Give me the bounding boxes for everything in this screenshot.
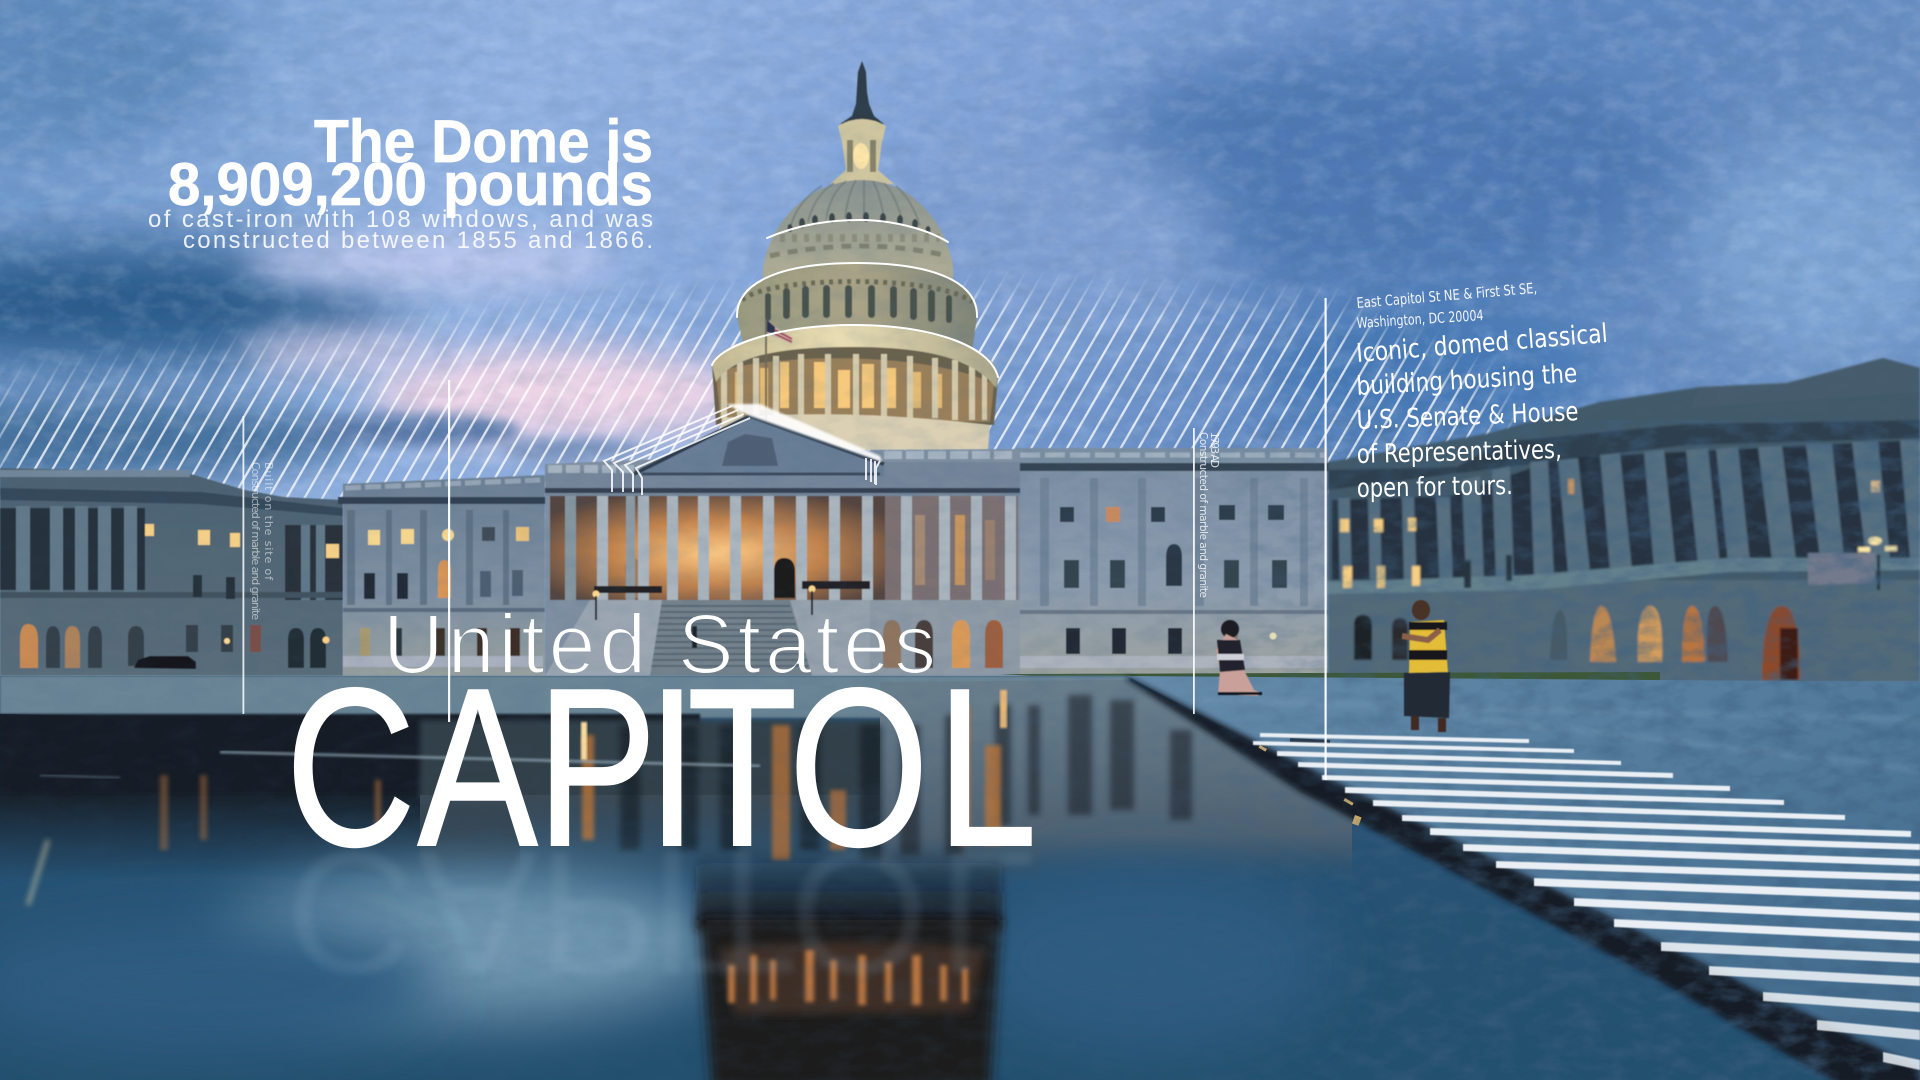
dome highlight arcs: [712, 220, 998, 377]
vertical caption left: Built on the site of: [262, 462, 275, 581]
lit colonnade: [712, 325, 998, 425]
description text: of Representatives,: [1356, 435, 1562, 470]
heading: The Dome is: The Dome is: [314, 108, 653, 175]
person: man in striped shirt: [1402, 600, 1450, 732]
white stripes on the plaza: [1253, 733, 1920, 1070]
address: [1356, 281, 1538, 332]
title: CAPITOL: CAPITOL: [286, 643, 1037, 894]
pediment: [634, 416, 884, 476]
description text: open for tours.: [1357, 471, 1513, 504]
reflection details: [160, 690, 1192, 860]
subtext line 2: constructed between 1855 and 1866.: [183, 227, 653, 254]
statue of freedom: [840, 61, 884, 124]
ghost reflection of CAPITOL: CAPITOL: [286, 814, 1037, 1011]
waterline: [220, 752, 760, 766]
central stairs: [545, 581, 1020, 676]
lit windows in the wing: [1340, 479, 1880, 588]
address: East Capitol St NE & First St SE,: [1356, 281, 1538, 312]
portico columns: [565, 495, 1016, 600]
vertical caption left: [249, 462, 275, 620]
pale shallow strip: [0, 676, 1130, 718]
entablature: [545, 455, 1020, 496]
description text: [1355, 319, 1609, 504]
reflected lights on pool edge: [1258, 745, 1362, 826]
parked car: [134, 656, 196, 669]
vertical guide lines: [242, 298, 1327, 780]
description text: Iconic, domed classical: [1355, 319, 1609, 369]
door: [774, 558, 795, 598]
central portico with columns and pediment: [545, 416, 1020, 676]
pool dark edge: [1127, 676, 1920, 1080]
upper drum with windows: [737, 263, 977, 352]
heading: weight: 8,909,200 pounds: [168, 151, 653, 218]
left block of the main building: [338, 475, 548, 676]
vertical caption right: [1197, 432, 1220, 598]
capitol dome: [712, 61, 998, 450]
grass strip: [1000, 672, 1660, 682]
dome shell: [763, 180, 953, 295]
dome reflection: [696, 850, 1002, 1080]
diagonal hatch band behind the building: [0, 270, 1520, 530]
person: seated woman: [1216, 620, 1262, 696]
right block of the main building: [1012, 448, 1332, 676]
arched openings: [1354, 606, 1800, 680]
description text: U.S. Senate & House: [1356, 397, 1579, 436]
vertical caption right: 1793 AD: [1208, 432, 1220, 468]
subtext line 1: of cast-iron with 108 windows, and was: [148, 206, 653, 233]
address: Washington, DC 20004: [1356, 308, 1484, 332]
sky background with clouds: [0, 0, 1920, 700]
description text: building housing the: [1356, 359, 1578, 402]
lower arches: [883, 620, 1003, 668]
reflecting pool: [0, 676, 1888, 1080]
title: United States: United States: [383, 597, 936, 691]
lamp reflection: [28, 840, 48, 905]
left wing of the building: [0, 468, 343, 676]
mist over the water: [0, 870, 1330, 1055]
american flag: [765, 320, 792, 425]
pediment highlight lines: [604, 404, 882, 495]
plaza beside the pool: [1127, 676, 1920, 1080]
wing lamp: [1858, 537, 1897, 590]
vertical caption right: Constructed of marble and granite: [1197, 432, 1209, 598]
description block: [1355, 281, 1609, 504]
drum base: [720, 414, 990, 450]
building reflection: [0, 680, 1352, 885]
far right wing in perspective: [1328, 358, 1920, 682]
vertical caption left: Constructed of marble and granite: [249, 462, 262, 620]
right wing columns: [1338, 440, 1920, 590]
lantern: [830, 119, 894, 184]
dome fact block: [148, 108, 653, 254]
